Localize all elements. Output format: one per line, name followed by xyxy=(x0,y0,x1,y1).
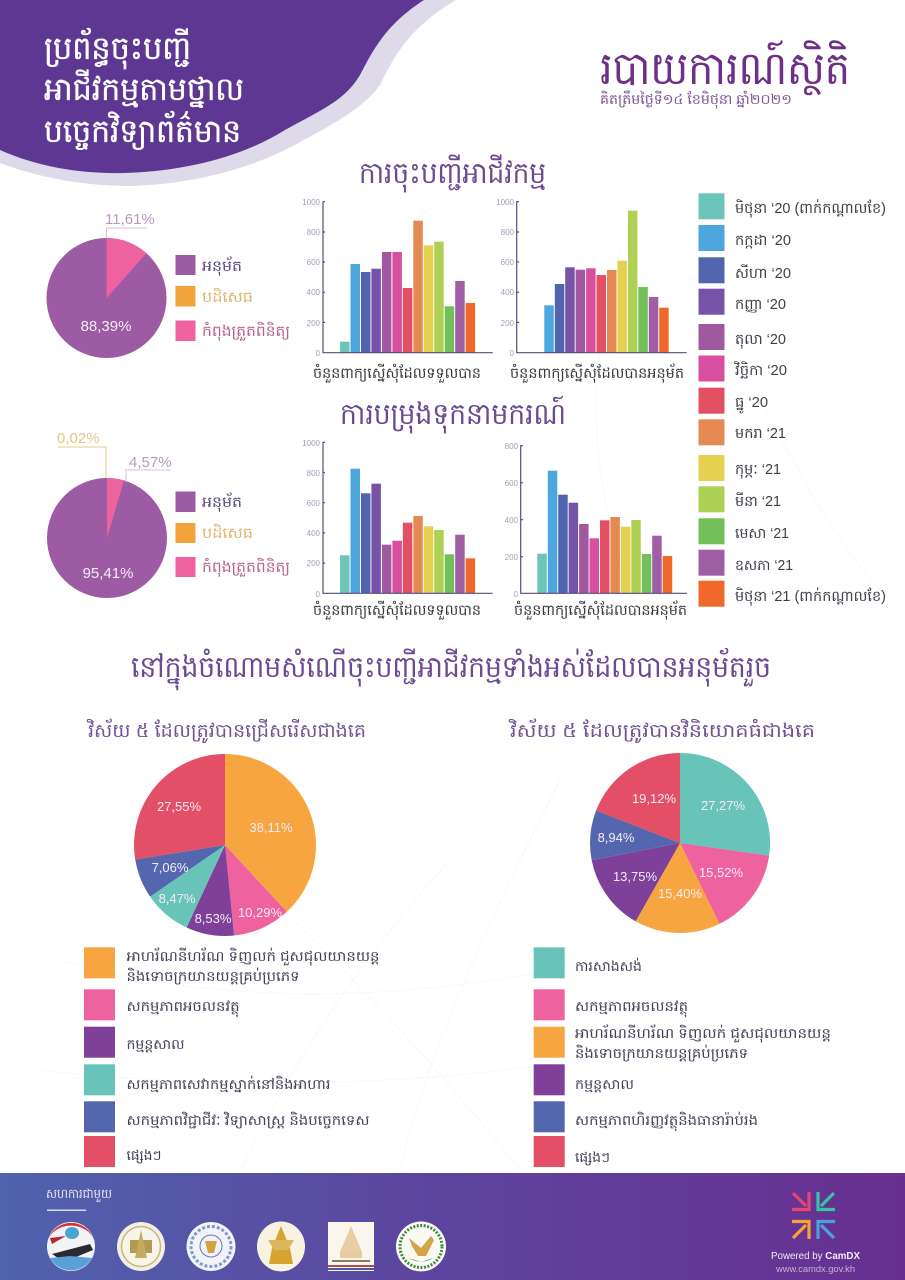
legend: months: ឧសភា ‘21 xyxy=(735,558,793,574)
bar chart: applications received, name reservation: 600 xyxy=(307,499,321,508)
legend: top invested sectors: ការសាងសង់ xyxy=(575,957,642,974)
legend: top chosen sectors: សកម្មភាពវិជ្ជាជីវៈ វិទ្យាសាស្ត្រ និងបច្ចេកទេស xyxy=(126,1111,370,1129)
legend: name reservation status xyxy=(176,492,290,577)
logo: partner two xyxy=(117,1222,165,1271)
pie: top chosen sectors: 10,29% xyxy=(238,905,282,920)
legend: top chosen sectors: សកម្មភាពអចលនវត្ថុ xyxy=(126,998,240,1018)
bar chart: applications approved, registration xyxy=(496,198,687,383)
title: ប្រព័ន្ធចុះបញ្ជី xyxy=(44,27,191,70)
pie: registration status: 88,39% xyxy=(81,318,131,335)
bar chart: applications approved, registration: 200 xyxy=(501,319,515,328)
bar chart: applications approved, name reservation: 200 xyxy=(505,553,519,562)
bar chart: applications approved, name reservation xyxy=(505,442,687,620)
logo: partner three xyxy=(186,1222,236,1271)
pie: name reservation status: 0,02% xyxy=(57,430,100,447)
bar chart: applications approved, name reservation: 800 xyxy=(505,442,519,451)
bar chart: applications received, name reservation: 200 xyxy=(307,559,321,568)
bar chart: applications approved, name reservation: ចំនួនពាក្យស្នើសុំដែលបានអនុម័ត xyxy=(514,600,687,620)
legend: top chosen sectors: និងទោចក្រយានយន្តគ្រប់ប្រភេទ xyxy=(126,967,300,985)
legend: top invested sectors xyxy=(534,947,831,1167)
heading: business registration: ការចុះបញ្ជីអាជីវកម្ម xyxy=(359,154,546,193)
bar chart: applications received, name reservation xyxy=(302,439,493,620)
partner label: សហការជាមួយ xyxy=(46,1186,112,1203)
pie: top chosen sectors: 38,11% xyxy=(249,820,293,835)
pie: registration status xyxy=(46,211,166,358)
legend: months: មិថុនា ‘21 (ពាក់កណ្តាលខែ) xyxy=(735,587,886,606)
legend: months: កុម្ភៈ ‘21 xyxy=(735,462,781,479)
legend: top invested sectors: សកម្មភាពហិរញ្ញវត្ថុនិងធានារ៉ាប់រង xyxy=(575,1111,758,1132)
legend: top invested sectors: អាហរ័ណនីហរ័ណ ទិញលក់ ជួសជុលយានយន្ត xyxy=(575,1024,831,1043)
title: បច្ចេកវិទ្យាព័ត៌មាន xyxy=(44,110,241,150)
legend: top invested sectors: សកម្មភាពអចលនវត្ថុ xyxy=(575,998,688,1018)
powered by: Powered by CamDX xyxy=(771,1250,860,1262)
legend: top chosen sectors: សកម្មភាពសេវាកម្មស្នាក់នៅនិងអាហារ xyxy=(126,1075,330,1093)
bar chart: applications approved, registration: 400 xyxy=(501,288,515,297)
legend: top invested sectors: ផ្សេងៗ xyxy=(575,1149,610,1166)
bar chart: applications received, registration: 800 xyxy=(307,228,321,237)
legend: months: កក្កដា ‘20 xyxy=(735,233,791,249)
pie: top invested sectors: 8,94% xyxy=(598,830,635,845)
pie: top invested sectors xyxy=(590,753,770,933)
pie: registration status: 11,61% xyxy=(105,211,155,228)
legend: top invested sectors: កម្មន្តសាល xyxy=(575,1076,634,1093)
logo: partner six xyxy=(396,1222,446,1272)
legend: registration status xyxy=(176,255,290,341)
header banner xyxy=(0,0,456,186)
bar chart: applications approved, name reservation: 600 xyxy=(505,479,519,488)
legend: registration status: បដិសេធ xyxy=(202,287,253,306)
bar chart: applications approved, name reservation: 400 xyxy=(505,516,519,525)
bar chart: applications received, name reservation: 400 xyxy=(307,529,321,538)
legend: top chosen sectors: អាហរ័ណនីហរ័ណ ទិញលក់ ជួសជុលយានយន្ត xyxy=(126,947,380,966)
legend: months: មីនា ‘21 xyxy=(735,492,781,510)
legend: name reservation status: បដិសេធ xyxy=(202,523,253,542)
title xyxy=(44,27,244,150)
pie: name reservation status: 4,57% xyxy=(129,454,172,471)
bar chart: applications received, registration: ចំនួនពាក្យស្នើសុំដែលទទួលបាន xyxy=(313,363,481,383)
pie: top invested sectors: 13,75% xyxy=(613,869,657,884)
legend: months: មិថុនា ‘20 (ពាក់កណ្តាលខែ) xyxy=(735,199,886,218)
pie: top invested sectors: 27,27% xyxy=(701,798,745,813)
legend: top invested sectors: និងទោចក្រយានយន្តគ្រប់ប្រភេទ xyxy=(575,1044,748,1062)
pie: top chosen sectors: 8,53% xyxy=(195,911,232,926)
heading: among approved registrations: នៅក្នុងចំណោមសំណើចុះបញ្ជីអាជីវកម្មទាំងអស់ដែលបានអនុម័តរួច xyxy=(131,647,771,691)
logo: partner one xyxy=(47,1222,95,1271)
report heading xyxy=(600,40,850,109)
legend: top chosen sectors: ផ្សេងៗ xyxy=(126,1147,162,1164)
pie: top invested sectors: 19,12% xyxy=(632,791,676,806)
legend: months: តុលា ‘20 xyxy=(735,332,786,349)
legend: months: កញ្ញា ‘20 xyxy=(735,297,786,313)
legend: months: សីហា ‘20 xyxy=(735,264,791,282)
bar chart: applications received, registration: 600 xyxy=(307,258,321,267)
bar chart: applications received, name reservation: 0 xyxy=(316,590,321,599)
logo: partner four xyxy=(257,1222,305,1272)
pie: name reservation status: 95,41% xyxy=(83,565,133,582)
subheading: top five invested sectors: វិស័យ ៥ ដែលត្រូវបានវិនិយោគធំជាងគេ xyxy=(508,718,815,744)
legend: months: មេសា ‘21 xyxy=(735,526,789,542)
logo: partner five xyxy=(328,1222,374,1271)
report heading: របាយការណ៍ស្ថិតិ xyxy=(600,40,850,96)
bar chart: applications received, name reservation: 800 xyxy=(307,469,321,478)
pie: top invested sectors: 15,52% xyxy=(699,865,743,880)
footer band xyxy=(0,1173,905,1280)
bar chart: applications received, registration: 1000 xyxy=(302,198,321,207)
legend: name reservation status: អនុម័ត xyxy=(202,492,242,512)
pie: name reservation status xyxy=(47,430,172,598)
legend: registration status: អនុម័ត xyxy=(202,256,242,276)
title: អាជីវកម្មតាមថ្នាល xyxy=(44,69,244,108)
legend: top chosen sectors: កម្មន្តសាល xyxy=(126,1036,184,1053)
pie: top chosen sectors: 7,06% xyxy=(152,860,189,875)
pie: top chosen sectors: 27,55% xyxy=(157,799,201,814)
legend: top chosen sectors xyxy=(84,947,380,1167)
bar chart: applications approved, registration: ចំនួនពាក្យស្នើសុំដែលបានអនុម័ត xyxy=(510,363,684,383)
report heading: គិតត្រឹមថ្ងៃទី១៤ ខែមិថុនា ឆ្នាំ២០២១ xyxy=(600,90,792,109)
legend: months xyxy=(698,193,886,607)
bar chart: applications received, name reservation: 1000 xyxy=(302,439,321,448)
bar chart: applications approved, registration: 800 xyxy=(501,228,515,237)
legend: registration status: កំពុងត្រួតពិនិត្យ xyxy=(202,321,290,341)
bar chart: applications received, registration: 400 xyxy=(307,288,321,297)
bar chart: applications received, registration: 0 xyxy=(316,349,321,358)
bar chart: applications approved, name reservation: 0 xyxy=(514,590,519,599)
website: www.camdx.gov.kh xyxy=(775,1264,855,1275)
bar chart: applications received, registration: 200 xyxy=(307,319,321,328)
logo: CamDX arrows xyxy=(792,1192,835,1239)
pie: top chosen sectors xyxy=(134,754,316,936)
pie: top invested sectors: 15,40% xyxy=(658,886,702,901)
subheading: top five chosen sectors: វិស័យ ៥ ដែលត្រូវបានជ្រើសរើសជាងគេ xyxy=(86,718,366,744)
bar chart: applications approved, registration: 1000 xyxy=(496,198,515,207)
legend: name reservation status: កំពុងត្រួតពិនិត្យ xyxy=(202,557,290,577)
legend: months: មករា ‘21 xyxy=(735,426,786,442)
pie: top chosen sectors: 8,47% xyxy=(159,891,196,906)
bar chart: applications approved, registration: 600 xyxy=(501,258,515,267)
bar chart: applications received, registration xyxy=(302,198,493,383)
legend: months: វិច្ឆិកា ‘20 xyxy=(734,361,787,379)
bar chart: applications approved, registration: 0 xyxy=(510,349,515,358)
bar chart: applications received, name reservation: ចំនួនពាក្យស្នើសុំដែលទទួលបាន xyxy=(313,600,481,620)
legend: months: ធ្នូ ‘20 xyxy=(735,395,768,414)
heading: name reservation: ការបម្រុងទុកនាមករណ៍ xyxy=(340,395,566,434)
